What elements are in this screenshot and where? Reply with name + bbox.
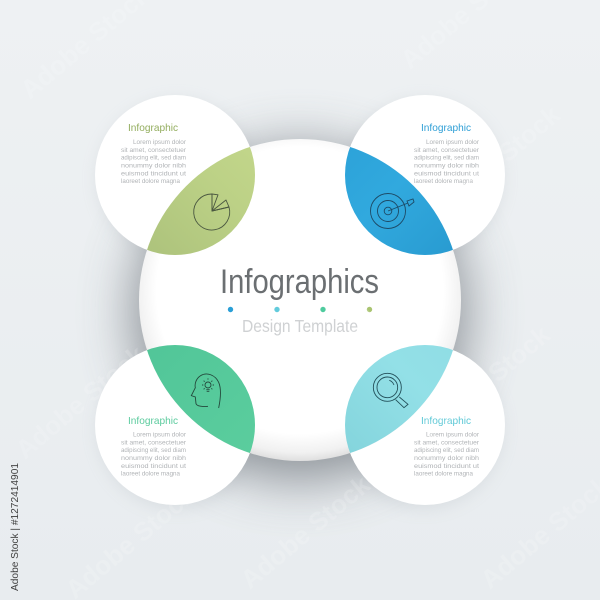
segment: emerald lens <box>147 345 255 453</box>
panel: top-right circle <box>345 95 505 255</box>
body: top-right: sit amet, consectetuer <box>414 148 479 154</box>
title: top-right: Infographic <box>421 123 471 134</box>
text block: top-right <box>414 123 479 185</box>
text block: top-left <box>121 123 186 185</box>
body: top-left: laoreet dolore magna <box>121 179 181 185</box>
title: bottom-right: Infographic <box>421 416 471 427</box>
infographic: Adobe Stock <box>415 319 556 445</box>
body: top-right: adipiscing elit, sed diam <box>414 156 479 162</box>
subheading: Design Template <box>242 316 358 336</box>
panel: bottom-right circle <box>345 345 505 505</box>
body: top-right: euismod tincidunt ut <box>414 172 479 178</box>
body: top-left: Lorem ipsum dolor <box>133 140 186 146</box>
icon: target with arrow <box>370 194 414 228</box>
segment: green lens <box>147 147 255 255</box>
panel: bottom-left circle <box>95 345 255 505</box>
infographic: Adobe Stock <box>250 299 391 425</box>
text block: bottom-right <box>414 416 479 478</box>
icon: head with light bulb <box>191 374 220 408</box>
body: top-left: euismod tincidunt ut <box>121 172 186 178</box>
panel: central circle <box>139 139 461 461</box>
body: bottom-left: laoreet dolore magna <box>121 472 181 478</box>
segment: blue lens <box>345 147 453 255</box>
title: top-left: Infographic <box>128 123 178 134</box>
body: top-right <box>414 140 479 185</box>
body: top-left <box>121 140 186 185</box>
icon: pie chart <box>194 194 230 230</box>
colored dots <box>228 307 372 312</box>
body: top-right: laoreet dolore magna <box>414 179 474 185</box>
body: bottom-left: Lorem ipsum dolor <box>133 432 186 438</box>
icon: magnifying glass <box>373 373 408 408</box>
body: bottom-right: Lorem ipsum dolor <box>426 432 479 438</box>
infographic <box>10 95 505 591</box>
body: top-left: nonummy dolor nibh <box>121 164 186 170</box>
infographic: Adobe Stock <box>235 469 376 595</box>
infographic: Adobe Stock <box>200 149 341 275</box>
body: bottom-right: adipiscing elit, sed diam <box>414 448 479 454</box>
body: bottom-left <box>121 432 186 478</box>
body: bottom-left: adipiscing elit, sed diam <box>121 448 186 454</box>
body: top-left: sit amet, consectetuer <box>121 148 186 154</box>
infographic: Adobe Stock <box>425 99 566 225</box>
body: bottom-right: nonummy dolor nibh <box>414 456 479 462</box>
title: bottom-left: Infographic <box>128 416 178 427</box>
stock id label: Adobe Stock | #1272414901 <box>9 463 21 591</box>
panel: top-left circle <box>95 95 255 255</box>
body: top-right: nonummy dolor nibh <box>414 164 479 170</box>
body: bottom-left: nonummy dolor nibh <box>121 456 186 462</box>
segment: aqua lens <box>345 345 453 453</box>
body: bottom-right: sit amet, consectetuer <box>414 440 479 446</box>
body: top-right: Lorem ipsum dolor <box>426 140 479 146</box>
body: bottom-left: sit amet, consectetuer <box>121 440 186 446</box>
body: bottom-right: laoreet dolore magna <box>414 472 474 478</box>
text block: bottom-left <box>121 416 186 478</box>
heading: Infographics <box>220 263 379 301</box>
infographic: Adobe Stock <box>10 339 151 465</box>
body: bottom-left: euismod tincidunt ut <box>121 464 186 470</box>
body: bottom-right: euismod tincidunt ut <box>414 464 479 470</box>
body: top-left: adipiscing elit, sed diam <box>121 156 186 162</box>
body: bottom-right <box>414 432 479 478</box>
